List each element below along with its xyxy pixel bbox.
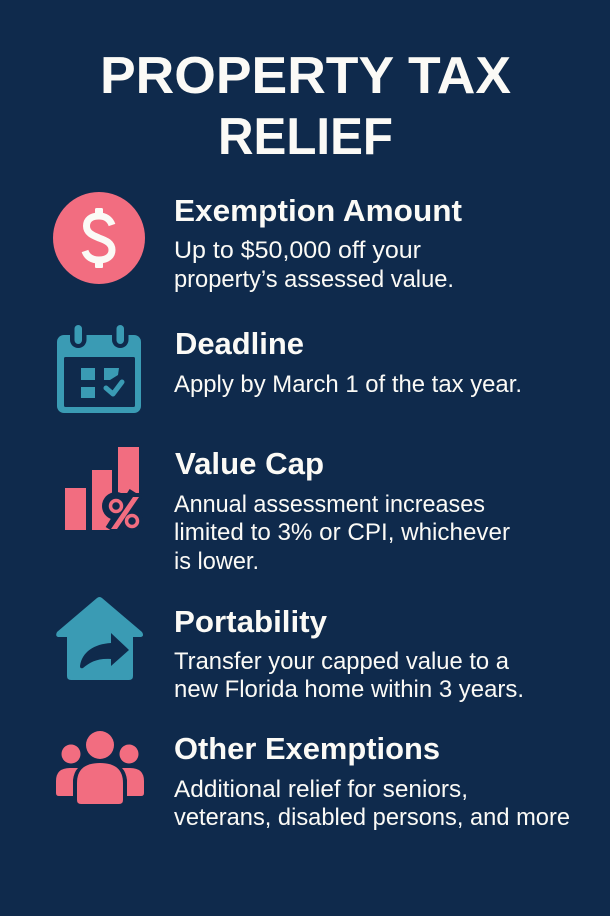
text: value cap description — [174, 491, 510, 575]
panel: other exemptions — [56, 731, 570, 831]
heading: portability: Portability — [174, 604, 328, 639]
panel: exemption amount — [53, 192, 462, 293]
title — [100, 47, 511, 166]
text: exemption amount description — [174, 237, 454, 293]
text: deadline description: Apply by March 1 of the tax year. — [174, 371, 522, 398]
text: value cap description: is lower. — [174, 548, 259, 575]
text: value cap description: limited to 3% or CPI, whichever — [174, 519, 510, 546]
text: other exemptions description: Additional relief for seniors, — [174, 776, 468, 803]
heading: other exemptions: Other Exemptions — [174, 731, 440, 766]
text: portability description — [174, 648, 524, 703]
icon: group of people — [56, 731, 144, 804]
text: portability description: Transfer your capped value to a — [174, 648, 509, 675]
heading: exemption amount: Exemption Amount — [174, 193, 462, 228]
heading: deadline: Deadline — [175, 326, 304, 361]
panel: deadline — [57, 322, 522, 413]
heading: value cap: Value Cap — [175, 446, 324, 481]
icon: calendar — [57, 322, 141, 413]
text: exemption amount description: property’s assessed value. — [174, 266, 454, 293]
icon: dollar coin — [53, 192, 145, 284]
panel: portability — [56, 597, 524, 703]
text: other exemptions description: veterans, disabled persons, and more — [174, 804, 570, 831]
text: exemption amount description: Up to $50,000 off your — [174, 237, 421, 264]
title: RELIEF — [218, 108, 393, 166]
text: portability description: new Florida home within 3 years. — [174, 676, 524, 703]
title: PROPERTY TAX — [100, 47, 511, 105]
panel: value cap — [65, 446, 510, 575]
icon: house with arrow — [56, 597, 143, 680]
text: other exemptions description — [174, 776, 570, 831]
icon: bars with percent — [65, 447, 143, 532]
text: value cap description: Annual assessment increases — [174, 491, 485, 518]
